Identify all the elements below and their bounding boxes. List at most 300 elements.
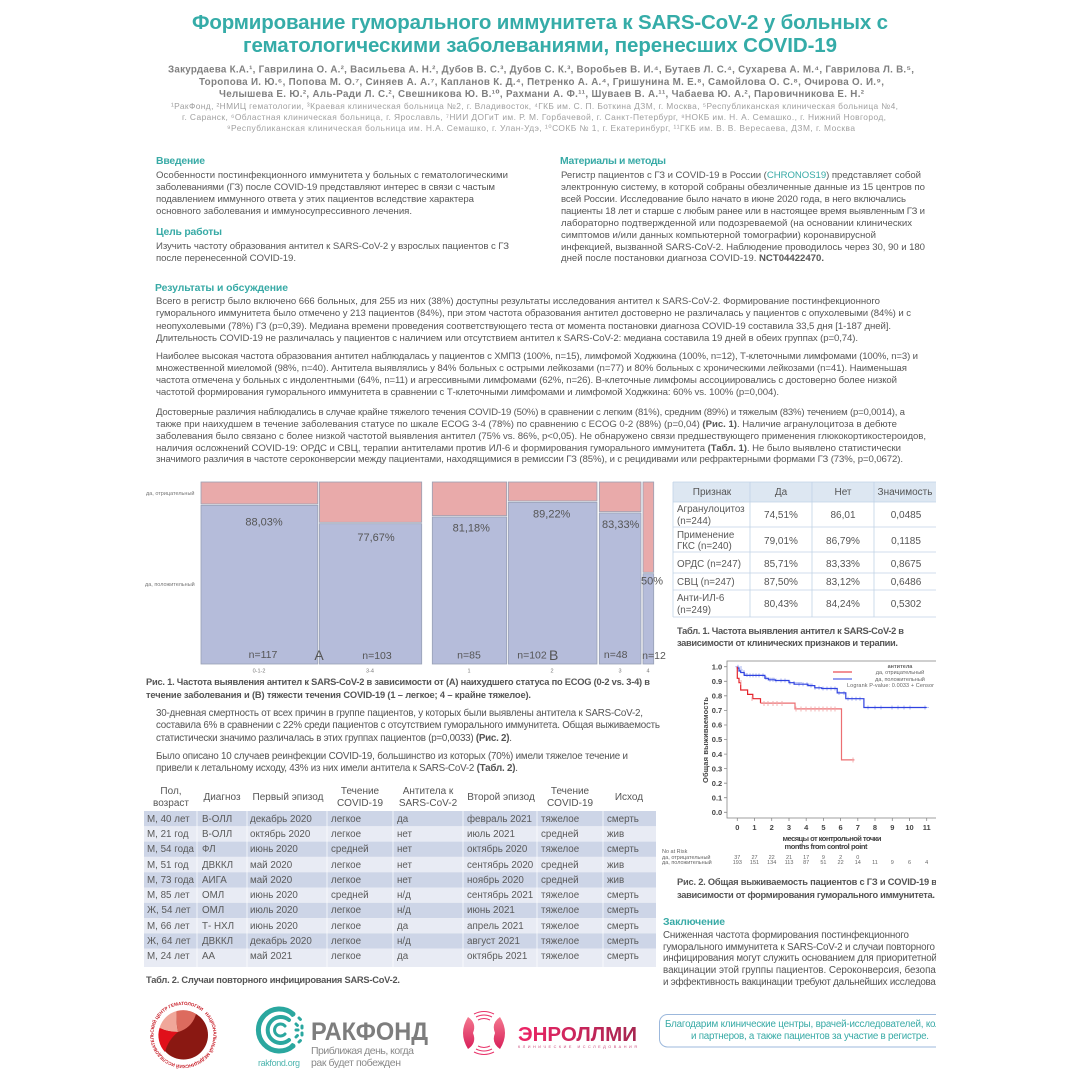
number at risk table: 87 [803, 860, 809, 866]
table 1 body: 74,51% [764, 510, 798, 521]
number at risk table: 22 [769, 855, 775, 861]
text: methods: пациенты 18 лет и старше с любым ранее или в настоящее время выявленным ГЗ и [561, 206, 925, 217]
table 2 body text: легкое [331, 921, 362, 932]
table 2 body text: жив [607, 860, 624, 871]
table 2 body text: М, 51 год [147, 860, 189, 871]
panel: materials and methods [560, 156, 925, 264]
table 2 header [153, 786, 643, 809]
number at risk table: 37 [734, 855, 740, 861]
x axis tick labels: 11 [923, 823, 931, 832]
text: results paragraph 2: частотой формирования гуморального иммунитета в сравнении с Т-клеточными лимфомами и лимфомой Ходжкина: 60% vs. 100% (p=0,004). [156, 387, 779, 398]
logo: rakfond: rakfond.org [258, 1058, 300, 1068]
heading: methods: Материалы и методы [560, 156, 666, 167]
x axis tick labels: 2 [770, 823, 774, 832]
panel: introduction [156, 156, 508, 217]
table 2 body text: легкое [331, 905, 362, 916]
table 2 body text: тяжелое [541, 936, 580, 947]
table 2 body text: тяжелое [541, 905, 580, 916]
table 2 header: Второй эпизод [467, 792, 535, 803]
table 2 body text: октябрь 2021 [467, 951, 527, 962]
sample size labels: n=103 [362, 650, 392, 662]
table 1 body: Применение [677, 530, 735, 541]
table 2 body text: июнь 2020 [250, 921, 298, 932]
table 2 body text: нет [397, 829, 413, 840]
table 2 body text: июль 2020 [250, 905, 298, 916]
number at risk table: 14 [855, 860, 861, 866]
y axis tick labels [712, 662, 723, 817]
number at risk table: 9 [822, 855, 825, 861]
x axis titles: месяцы от контрольной точки [782, 834, 882, 843]
text: results paragraph 3: наличия осложнений COVID-19: ОРДС и СВЦ, терапии антителами против ИЛ-6 и формирования гуморального иммунитета (Табл. 1). Не было выявлено статистически [156, 443, 901, 454]
callout: acknowledgements [660, 1014, 980, 1047]
title: гематологическими заболеваниями, перенесших COVID-19 [243, 34, 837, 57]
table 1 body: 84,24% [826, 599, 860, 610]
title: Формирование гуморального иммунитета к SARS-CoV-2 у больных с [192, 11, 888, 34]
table 2 body text: да [397, 814, 409, 825]
plot legend: антитела [888, 664, 913, 670]
text: survival paragraph: составила 6% в сравнении с 22% среди пациентов с отсутствием гуморального иммунитета. Общая выживаемость [156, 720, 660, 731]
table 1 body: 79,01% [764, 536, 798, 547]
text: results paragraph 1: Всего в регистр было включено 666 больных, для 255 из них (38%) доступны результаты исследования антител к SARS-CoV-2. Формирование постинфекционного [156, 296, 880, 307]
y axis category labels: да, положительный [145, 581, 195, 588]
x axis labels: 0-1-2 [253, 668, 265, 674]
x axis tick labels [735, 823, 931, 832]
plot legend: да, положительный [875, 676, 925, 683]
table 2 body text: июнь 2021 [467, 905, 515, 916]
number at risk table: 0 [856, 855, 859, 861]
text: survival paragraph: статистически значимо различалась в этих группах пациентов (p=0,0033) (Рис. 2). [156, 733, 512, 744]
table 1 body: ОРДС (n=247) [677, 559, 741, 570]
text: introduction [156, 170, 508, 217]
number at risk table [662, 849, 928, 866]
logo: enrollmi: КЛИНИЧЕСКИЕ ИССЛЕДОВАНИЯ [518, 1045, 637, 1049]
table 2 body text: В-ОЛЛ [202, 829, 232, 840]
number at risk table: 4 [925, 860, 928, 866]
x axis labels: 2 [550, 668, 554, 674]
table 2 rows background [144, 811, 656, 967]
heading: aim: Цель работы [156, 226, 222, 238]
x axis labels: 3 [618, 668, 622, 674]
text: survival paragraph: 30-дневная смертность от всех причин в группе пациентов, у которых были выявлены антитела к SARS-CoV-2, [156, 708, 643, 719]
text: methods: симптомов и/или данных компьютерной томографии) коронавирусной [561, 230, 876, 241]
y axis tick labels: 0.4 [712, 750, 723, 759]
plot legend: Logrank P-value: 0.0033 + Censor [847, 683, 934, 689]
table 2 body text: апрель 2021 [467, 921, 524, 932]
table 2 body text: октябрь 2020 [250, 829, 311, 840]
text: aim: после перенесенной COVID-19. [156, 253, 296, 264]
table 2 body text: июнь 2020 [250, 844, 298, 855]
number at risk table: 22 [838, 860, 844, 866]
number at risk table: 2 [839, 855, 842, 861]
table 1 body: 0,0485 [891, 510, 922, 521]
table 2 body text: М, 85 лет [147, 890, 190, 901]
number at risk table: 21 [786, 855, 792, 861]
table 2 body text: тяжелое [541, 844, 580, 855]
table 2 body text: смерть [607, 814, 639, 825]
table 2 body text: легкое [331, 860, 362, 871]
table 1 body: 87,50% [764, 577, 798, 588]
logo: hematology center: НАЦИОНАЛЬНЫЙ МЕДИЦИНСКИЙ ИССЛЕДОВАТЕЛЬСКИЙ ЦЕНТР ГЕМАТОЛОГИИ [150, 1002, 216, 1069]
x axis titles [782, 834, 882, 851]
table 2 body text: да [397, 921, 409, 932]
text: methods: инфекцией, вызванной SARS-CoV-2. Наблюдение проводилось через 30, 90 и 180 [561, 242, 925, 253]
table 2 header: Пол, [160, 786, 182, 797]
caption: figure 1 [146, 677, 650, 700]
x axis labels: 1 [467, 668, 471, 674]
y axis title: Общая выживаемость [701, 697, 710, 783]
y axis tick labels: 0.5 [712, 735, 722, 744]
number at risk table: да, положительный [662, 859, 712, 866]
table 2: reinfection cases [144, 786, 656, 967]
authors [168, 64, 914, 100]
table 2 body text: февраль 2021 [467, 814, 532, 825]
table 1 body: 85,71% [764, 559, 798, 570]
table 2 body text: М, 24 лет [147, 951, 190, 962]
text: results paragraph 3: значимого различия в частоте сероконверсии между пациентами, находящимися в ремиссии ГЗ (85%), и с рецидивами или рефрактерными формами ГЗ (73%, p=0,0672). [156, 454, 903, 465]
table 1 body: 0,5302 [891, 599, 922, 610]
authors: Торопова И. Ю.⁶, Попова М. О.⁷, Синяев А. А.⁷, Капланов К. Д.⁴, Петренко А. А.⁴, Гришунина М. Е.⁸, Самойлова О. С.⁸, Очирова О. И.⁹, [199, 77, 884, 88]
number at risk table: 17 [803, 855, 809, 861]
number at risk table: 9 [891, 860, 894, 866]
chart panel B [432, 482, 654, 664]
chart: Kaplan-Meier survival [662, 661, 942, 866]
table 2 body text: М, 66 лет [147, 921, 190, 932]
table 2 body text: сентябрь 2021 [467, 890, 533, 901]
logo: enrollmi [463, 1012, 637, 1054]
text: methods: дней после постановки диагноза COVID-19. NCT04422470. [561, 253, 824, 264]
text: introduction: основного заболевания и иммуносупрессивного лечения. [156, 206, 412, 217]
text: aim: Изучить частоту образования антител к SARS-CoV-2 у взрослых пациентов с ГЗ [156, 241, 509, 252]
table 1 header: Значимость [878, 487, 932, 498]
icon: lifebuoy [463, 1012, 505, 1054]
table 2 body text: средней [541, 875, 579, 886]
y axis tick labels: 0.1 [712, 793, 722, 802]
affiliations: г. Саранск, ⁶Областная клиническая больница, г. Ярославль, ⁷НИИ ДОГиТ им. Р. М. Горбачевой, г. Санкт-Петербург, ⁸НОКБ им. Н. А. Семашко., г. Нижний Новгород, [182, 112, 886, 122]
table 2 body text: М, 40 лет [147, 814, 190, 825]
authors: Закурдаева К.А.¹, Гаврилина О. А.², Васильева А. Н.², Дубов В. С.³, Дубов С. К.³, Воробьев В. И.⁴, Бутаев Л. С.⁴, Сухарева А. М.⁴, Гаврилова Л. В.⁵, [168, 64, 914, 76]
text: introduction: заболеваниями (ГЗ) после COVID-19 представляют интерес в связи с частым [156, 182, 495, 193]
logo: rakfond: РАКФОНД [311, 1018, 428, 1046]
affiliations [171, 101, 898, 133]
table 2 body text: смерть [607, 951, 639, 962]
text: results paragraph 2 [156, 351, 918, 398]
y axis category labels: да, отрицательный [146, 490, 194, 497]
percentage labels: 50% [641, 576, 663, 588]
table 1 header: Признак [693, 487, 732, 498]
table 2 body text: ДВККЛ [202, 936, 233, 947]
text: reinfection paragraph: Было описано 10 случаев реинфекции COVID-19, большинство из которых (70%) имели тяжелое течение и [156, 751, 628, 762]
table 2 header: Исход [615, 792, 643, 803]
table 1 grid [673, 482, 936, 617]
x axis labels [252, 668, 650, 672]
table 2 body text: смерть [607, 890, 639, 901]
text: methods: Регистр пациентов с ГЗ и COVID-19 в России (CHRONOS19) представляет собой [561, 170, 921, 181]
table 2 header: Течение [341, 786, 380, 797]
x axis tick labels: 8 [873, 823, 877, 832]
sample size labels: n=12 [642, 650, 666, 662]
table 2 body text: средней [541, 860, 579, 871]
number at risk table: 151 [750, 860, 759, 866]
text: introduction: Особенности постинфекционного иммунитета у больных с гематологическими [156, 170, 508, 181]
blue survival curve [735, 665, 929, 710]
table 2 body text: н/д [397, 890, 411, 901]
table 1 body: 0,8675 [891, 559, 922, 570]
title [192, 11, 888, 57]
table 1 header: Да [775, 487, 788, 498]
heading: conclusion: Заключение [663, 917, 725, 928]
chart panel A [201, 482, 422, 664]
table 2 body text [147, 814, 639, 962]
text: results paragraph 2: частота отмечена у больных с индолентными (64%, n=11) и агрессивными лимфомами (62%, n=26). В-клеточные лимфомы ассоциировались с достоверно более низкой [156, 375, 897, 386]
text: results paragraph 3: также при наихудшем в течение заболевания статусе по шкале ECOG 3-4 (78%) по сравнению с ECOG 0-2 (88%) (p=0,04) (Рис. 1). Наличие агранулоцитоза в дебюте [156, 419, 897, 430]
table 2 body text: май 2020 [250, 875, 293, 886]
table 2 body text: смерть [607, 936, 639, 947]
y axis tick labels: 0.3 [712, 764, 722, 773]
table 2 body text: ФЛ [202, 844, 216, 855]
table 2 body text: Т- НХЛ [202, 921, 234, 932]
caption: table 1 [677, 626, 904, 648]
affiliations: ¹РакФонд, ²НМИЦ гематологии, ³Краевая клиническая больница №2, г. Владивосток, ⁴ГКБ им. С. П. Боткина ДЗМ, г. Москва, ⁵Республиканская клиническая больница №4, [171, 101, 898, 111]
percentage labels: 88,03% [245, 517, 283, 529]
text: results paragraph 2: множественной миеломой (98%, n=40). Антитела выявлялись у 84% больных с острыми лейкозами (n=77) и 80% больных с хроническими лейкозами (n=41). Наименьшая [156, 363, 907, 374]
table 2 body text: ОМЛ [202, 905, 224, 916]
table 2 body text: АИГА [202, 875, 227, 886]
y axis tick labels: 1.0 [712, 662, 722, 672]
y axis tick labels: 0.6 [712, 721, 722, 730]
text: results paragraph 1 [156, 296, 911, 344]
table 2 header: Диагноз [203, 792, 241, 803]
table 1 body: 86,01 [830, 510, 856, 521]
y axis tick labels: 0.7 [712, 706, 722, 715]
table 2 body text: смерть [607, 844, 639, 855]
table 2 body text: тяжелое [541, 890, 580, 901]
authors: Челышева Е. Ю.², Аль-Ради Л. С.², Свешникова Ю. В.¹⁰, Рахмани А. Ф.¹¹, Шуваев В. А.¹¹, Чабаева Ю. А.², Паровичникова Е. Н.² [219, 89, 865, 100]
number at risk table: 134 [767, 860, 776, 866]
text: methods: всей России. Исследование было начато в июне 2020 года, в него включались [561, 194, 906, 205]
icon: rakfond rings [258, 1009, 302, 1051]
x axis tick labels: 5 [821, 823, 825, 832]
table 2 body text: да [397, 951, 409, 962]
table 1 body: СВЦ (n=247) [677, 577, 735, 588]
table 2 body text: Ж, 64 лет [147, 936, 191, 947]
table 2 body text: май 2020 [250, 860, 293, 871]
chart: mosaic figure 1 [145, 482, 666, 674]
number at risk table: да, отрицательный [662, 854, 710, 861]
percentage labels: 81,18% [453, 522, 490, 534]
sample size labels: n=85 [457, 650, 481, 662]
sample size labels: n=117 [249, 649, 278, 661]
table 1 body: 0,6486 [891, 577, 922, 588]
table 2 body text: жив [607, 875, 624, 886]
table 2 body text: легкое [331, 814, 362, 825]
table 1 body: 83,12% [826, 577, 860, 588]
text: reinfection paragraph [156, 751, 628, 774]
table 2 body text: ОМЛ [202, 890, 224, 901]
caption: figure 2: зависимости от формирования гуморального иммунитета. [677, 890, 935, 900]
sample size labels: A [314, 647, 324, 663]
table 1 body: (n=244) [677, 516, 711, 527]
table 1 body: 0,1185 [891, 536, 921, 547]
table 2 body text: легкое [331, 829, 362, 840]
table 2 body text: средней [331, 890, 369, 901]
sample size labels: n=48 [604, 649, 628, 661]
number at risk table: No at Risk [662, 849, 688, 855]
panel: aim [156, 226, 509, 264]
table 2 body text: средней [331, 844, 369, 855]
table 2 body text: нет [397, 875, 413, 886]
table 2 body text: В-ОЛЛ [202, 814, 232, 825]
caption: table 1: зависимости от клинических признаков и терапии. [677, 638, 898, 648]
x axis tick labels: 0 [735, 823, 739, 832]
heading: results: Результаты и обсуждение [155, 282, 288, 294]
table 2 body text: Ж, 54 лет [147, 905, 191, 916]
y axis tick labels: 0.9 [712, 677, 722, 686]
table 2 body text: нет [397, 860, 413, 871]
text: results paragraph 1: гуморального иммунитета было отмечено у 213 пациентов (84%), при этом частота образования антител достоверно не различалась у пациентов с опухолевыми (84%) и с [156, 308, 911, 319]
logo: rakfond [258, 1009, 428, 1069]
text: results paragraph 1: неопухолевыми (78%) ГЗ (p=0,39). Медиана времени проведения соответствующего теста от момента постановки диагноза COVID-19 составила 33,5 дня [1-187 дней]. [156, 321, 891, 332]
table 2 body text: октябрь 2020 [467, 844, 528, 855]
caption: table 1: Табл. 1. Частота выявления антител к SARS-CoV-2 в [677, 626, 904, 636]
heading: introduction: Введение [156, 156, 205, 167]
x axis tick labels: 1 [752, 823, 757, 832]
number at risk table: 11 [872, 860, 878, 866]
x axis tick labels: 6 [839, 823, 843, 832]
logo: rakfond: Приближая день, когда [311, 1045, 414, 1057]
x axis tick labels: 10 [905, 823, 914, 832]
percentage labels: 83,33% [602, 519, 640, 531]
table 2 body text: июль 2021 [467, 829, 515, 840]
table 1 body: Агранулоцитоз [677, 504, 745, 515]
table 2 body text: сентябрь 2020 [467, 860, 534, 871]
table 2 body text: АА [202, 951, 216, 962]
table 1 header: Нет [834, 487, 852, 498]
percentage labels: 89,22% [533, 509, 571, 521]
x axis tick labels: 7 [856, 823, 860, 832]
table 2 body text: средней [541, 829, 579, 840]
table 2 body text: тяжелое [541, 921, 580, 932]
sample size labels: B [549, 647, 558, 663]
table 2 body text: тяжелое [541, 814, 580, 825]
x axis titles: months from control point [784, 842, 868, 851]
text: results paragraph 3: Достоверные различия наблюдались в случае крайне тяжелого течения COVID-19 (50%) в сравнении с легким (81%), средним (89%) и тяжелым (83%) течением (p=0,0014), а [156, 407, 906, 418]
percentage labels: 77,67% [357, 532, 395, 544]
number at risk table: 51 [820, 860, 826, 866]
callout: acknowledgements: и партнеров, а также пациентов за участие в регистре. [691, 1031, 929, 1042]
plot legend: да, отрицательный [876, 669, 924, 676]
table 1 body: (n=249) [677, 605, 711, 616]
table 1 body: Анти-ИЛ-6 [677, 593, 725, 604]
y axis tick labels: 0.0 [712, 808, 722, 817]
percentage labels [245, 509, 663, 588]
red survival curve [737, 667, 854, 762]
table 1 body [677, 504, 922, 616]
y axis tick labels: 0.8 [712, 692, 722, 700]
x axis labels: 3-4 [366, 668, 374, 674]
table 2 body text: тяжелое [541, 951, 580, 962]
text: conclusion: гуморального иммунитета к SARS-CoV-2 и случаи повторного [663, 942, 936, 953]
table 2 body text: август 2021 [467, 936, 520, 947]
table 2 body text: декабрь 2020 [250, 814, 312, 825]
table 2 header: Первый эпизод [253, 792, 324, 803]
table 2 header: Антитела к [403, 786, 454, 797]
table 1 body: ГКС (n=240) [677, 541, 732, 552]
text: aim [156, 241, 509, 264]
table 2 body text: М, 73 года [147, 875, 195, 886]
number at risk table: 193 [733, 860, 742, 866]
caption: figure 2 [677, 877, 937, 900]
text: results paragraph 3: заболевания было связано с более низкой частотой выявления антител (75% vs. 86%, p<0,05). Не обнаружено связи предшествующего применения глюкокортикостероидов, [156, 431, 926, 442]
plot legend [833, 664, 934, 689]
table 1 body: 86,79% [826, 536, 860, 547]
panel: conclusion [663, 917, 966, 988]
caption: table 2: Табл. 2. Случаи повторного инфицирования SARS-CoV-2. [146, 975, 400, 985]
table 2 body text: жив [607, 829, 624, 840]
number at risk table: 27 [751, 855, 758, 861]
table 2 header: SARS-CoV-2 [399, 798, 458, 809]
table 1: antibody frequency by clinical features [673, 482, 936, 617]
text: conclusion: и эффективность вакцинации требуют дальнейших исследований. [663, 977, 954, 988]
table 2 body text: М, 54 года [147, 844, 195, 855]
callout: acknowledgements: Благодарим клинические центры, врачей-исследователей, коллег [665, 1019, 955, 1030]
table 2 body text: смерть [607, 921, 639, 932]
text: conclusion: Сниженная частота формирования постинфекционного [663, 930, 910, 941]
text: results paragraph 2: Наиболее высокая частота образования антител наблюдалась у пациентов с ХМПЗ (100%, n=15), лимфомой Ходжкина (100%, n=12), Т-клеточными лимфомами (100%, n=3) и [156, 351, 918, 362]
logo: rakfond: рак будет побежден [311, 1057, 401, 1069]
number at risk table: 113 [785, 860, 793, 866]
table 1 header [694, 488, 932, 497]
text: methods: электронную систему, в которой собраны обезличенные данные из 15 центров по [561, 182, 925, 193]
table 2 body text: легкое [331, 875, 362, 886]
text: conclusion: вакцинации этой группы пациентов. Сероконверсия, безопасность [663, 965, 966, 976]
text: methods: лабораторно подтвержденной или подозреваемой (на основании клинических [561, 218, 912, 229]
x axis tick labels: 3 [787, 823, 791, 832]
table 2 body text: н/д [397, 936, 411, 947]
text: methods [561, 170, 925, 264]
table 2 body text: ноябрь 2020 [467, 875, 524, 886]
sample size labels: n=102 [517, 650, 547, 662]
y axis category labels [145, 490, 195, 588]
table 2 header: Течение [551, 786, 590, 797]
table 2 body text: легкое [331, 936, 362, 947]
x axis tick labels: 4 [804, 823, 809, 832]
x axis labels: 4 [646, 668, 650, 674]
text: results paragraph 1: Длительность COVID-19 не различалась у пациентов с наличием или отсутствием антител к SARS-CoV-2: медиана составила 19 дней в обеих группах (p=0,74). [156, 333, 858, 344]
table 2 body text: декабрь 2020 [250, 936, 312, 947]
panel: results and discussion [155, 282, 926, 465]
caption: figure 1: течение заболевания и (В) тяжести течения COVID-19 (1 – легкое; 4 – крайне тяжелое). [146, 690, 531, 700]
table 2 body text: смерть [607, 905, 639, 916]
table 2 body text: н/д [397, 905, 411, 916]
caption: figure 2: Рис. 2. Общая выживаемость пациентов с ГЗ и COVID-19 в [677, 877, 937, 887]
logo: enrollmi: ЭНРОЛЛМИ [518, 1024, 637, 1046]
text: conclusion [663, 930, 966, 988]
table 1 body: 80,43% [764, 599, 798, 610]
affiliations: ⁹Республиканская клиническая больница им. Н.А. Семашко, г. Улан-Удэ, ¹⁰СОКБ № 1, г. Екатеринбург, ¹¹ГКБ им. В. В. Вересаева, ДЗМ, г. Москва [227, 123, 855, 133]
table 2 header: COVID-19 [337, 798, 383, 809]
table 2 header: COVID-19 [547, 798, 593, 809]
table 2 body text: М, 21 год [147, 829, 189, 840]
text: survival paragraph [156, 708, 660, 744]
text: reinfection paragraph: привели к летальному исходу, 43% из них имели антитела к SARS-CoV-2 (Табл. 2). [156, 763, 518, 774]
text: introduction: подавлением иммунного ответа у этих пациентов вследствие характера [156, 194, 475, 205]
plot frame and ticks [724, 661, 942, 821]
caption: figure 1: Рис. 1. Частота выявления антител к SARS-CoV-2 в зависимости от (А) наихудшего статуса по ECOG (0-2 vs. 3-4) в [146, 677, 650, 687]
x axis tick labels: 9 [890, 823, 894, 832]
sample size labels [249, 650, 666, 660]
text: results paragraph 3 [156, 407, 926, 465]
table 2 body text: нет [397, 844, 413, 855]
